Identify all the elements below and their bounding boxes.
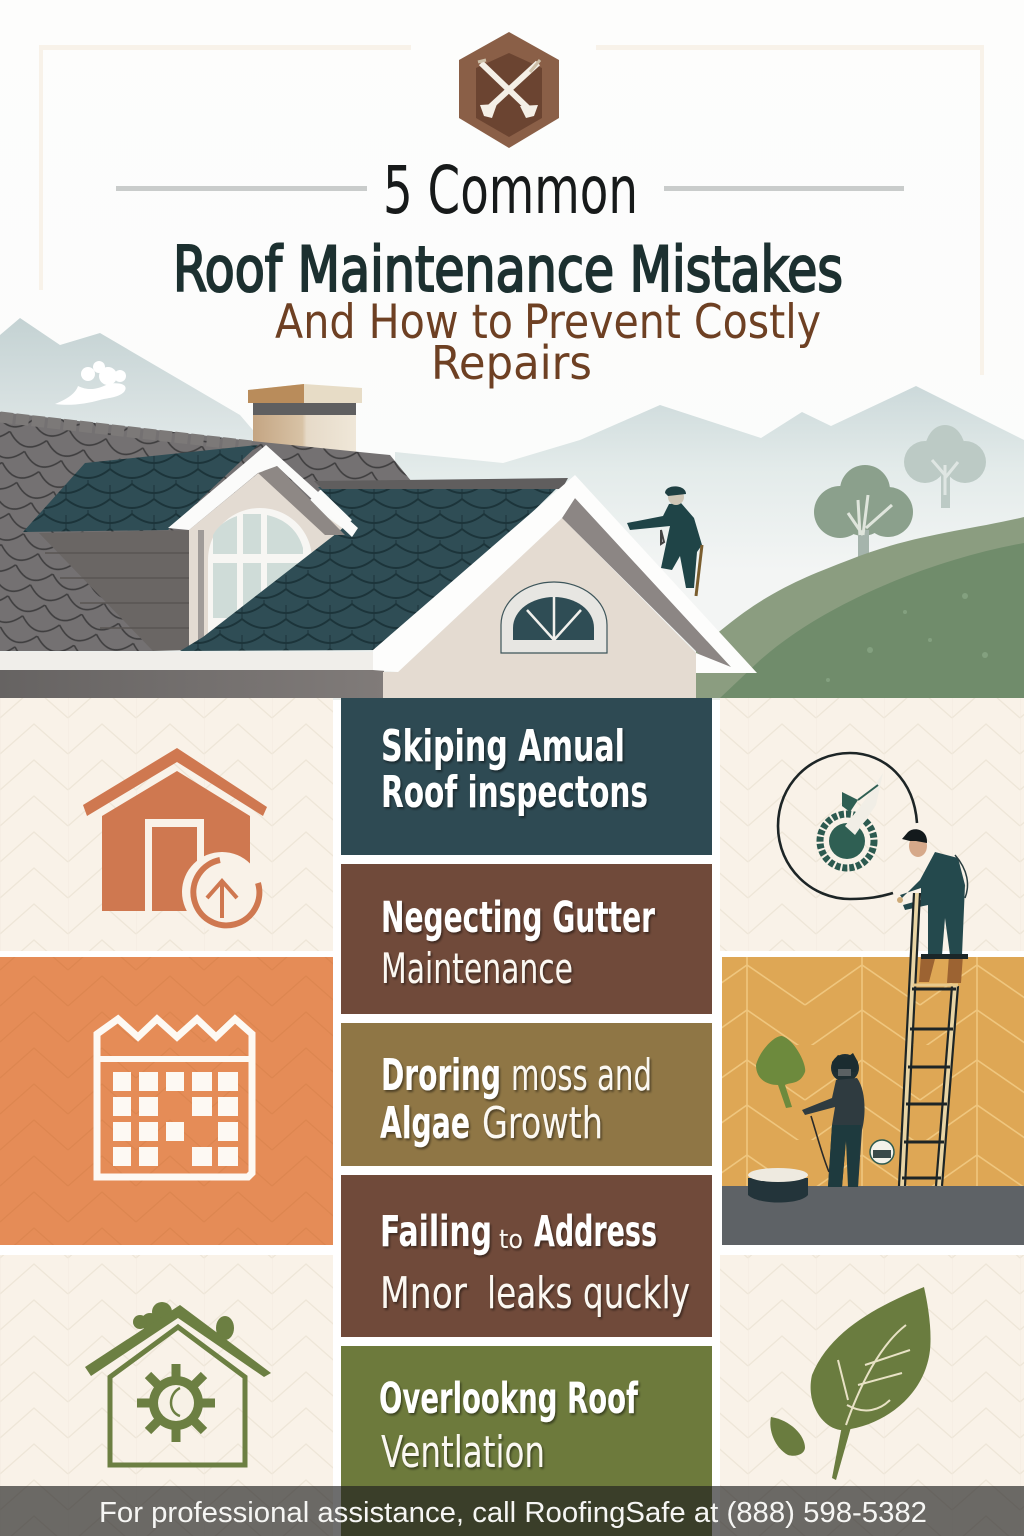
chimney — [248, 384, 362, 455]
panel: mistake 1: Roof inspectons — [381, 767, 648, 818]
trees — [814, 425, 986, 564]
title: 5 Common with side rules — [116, 152, 904, 229]
sky background — [0, 0, 1024, 700]
panel: mistake 1: Skiping Amual — [381, 721, 625, 772]
panel: left orange — [0, 957, 333, 1245]
icon: house with ventilation gear — [85, 1302, 271, 1465]
cloud — [55, 361, 126, 405]
panel: right yellow with floor — [722, 957, 1024, 1245]
panel: mistake 2: Negecting Gutter — [381, 893, 655, 943]
panel: mistake 4: to — [499, 1225, 523, 1255]
panel: mistake 3: moss and — [511, 1050, 652, 1101]
panel: mistake 4: Failing — [380, 1207, 492, 1257]
house: grey roof — [0, 412, 412, 651]
house: main gable wall — [383, 518, 696, 698]
panel: mistake 4 — [341, 1175, 712, 1337]
panel: mistake 5: Ventlation — [381, 1427, 545, 1478]
panel: mistake 3 — [341, 1023, 712, 1166]
panel: mistake 4: Address — [534, 1207, 657, 1257]
frame lines around title — [39, 45, 984, 375]
panel: mistake 3: Algae — [380, 1098, 470, 1149]
panel: right lower cream — [720, 1255, 1024, 1536]
icon: inspector on ladder with loupe — [778, 753, 968, 983]
house: siding wall — [39, 530, 189, 651]
title: 5 Common with side rules: 5 Common — [383, 152, 638, 229]
icon: ladder — [899, 893, 958, 1186]
icon: calendar — [97, 1019, 252, 1177]
house: dormer window — [198, 508, 312, 650]
panel: mistake 5 — [341, 1346, 712, 1536]
panel: mistake 5: Overlookng Roof — [379, 1374, 639, 1424]
house: upper roof band — [314, 478, 568, 489]
panel: left cream — [0, 698, 333, 951]
house: gutter and fascia — [0, 652, 384, 698]
subtitle: And How to Prevent Costly Repairs: And How to — [275, 295, 513, 350]
panel: mistake 4: leaks quckly — [487, 1268, 690, 1319]
worker on roof — [627, 486, 702, 596]
panel: left lower cream — [0, 1255, 333, 1536]
house: main teal roof — [180, 487, 558, 651]
panel: mistake 4: Mnor — [380, 1268, 468, 1319]
house: dormer teal roof — [23, 445, 258, 532]
panel: right cream — [720, 698, 1024, 951]
footer bar with contact: For professional assistance, call RoofingSafe at (888) 598-5382 — [99, 1497, 927, 1529]
icon: green leaf — [770, 1287, 931, 1480]
subtitle: And How to Prevent Costly Repairs — [275, 295, 821, 390]
panel: mistake 3: Growth — [482, 1098, 603, 1149]
subtitle: And How to Prevent Costly Repairs: Repairs — [431, 336, 592, 390]
footer bar with contact — [0, 1486, 1024, 1536]
house: dormer wall — [189, 470, 345, 650]
background mountains — [0, 318, 1024, 640]
panel: mistake 2: Maintenance — [381, 944, 573, 993]
panel: mistake 3: Droring — [381, 1050, 501, 1101]
icon: worker with moss bucket — [748, 1036, 894, 1202]
house: half-round attic window — [501, 582, 607, 653]
panel: mistake 2 — [341, 864, 712, 1014]
panel: mistake 1 — [341, 698, 712, 855]
house: main gable trim — [373, 475, 757, 673]
icon: house with inspection arrow — [83, 748, 267, 932]
title: Roof Maintenance Mistakes: Roof Maintenance Mistakes — [173, 233, 843, 306]
house: dormer white gable — [168, 445, 358, 537]
icon: hexagon badge with crossed hammers — [459, 32, 559, 148]
green hills — [696, 517, 1024, 698]
subtitle: And How to Prevent Costly Repairs: Prevent Costly — [524, 295, 821, 350]
